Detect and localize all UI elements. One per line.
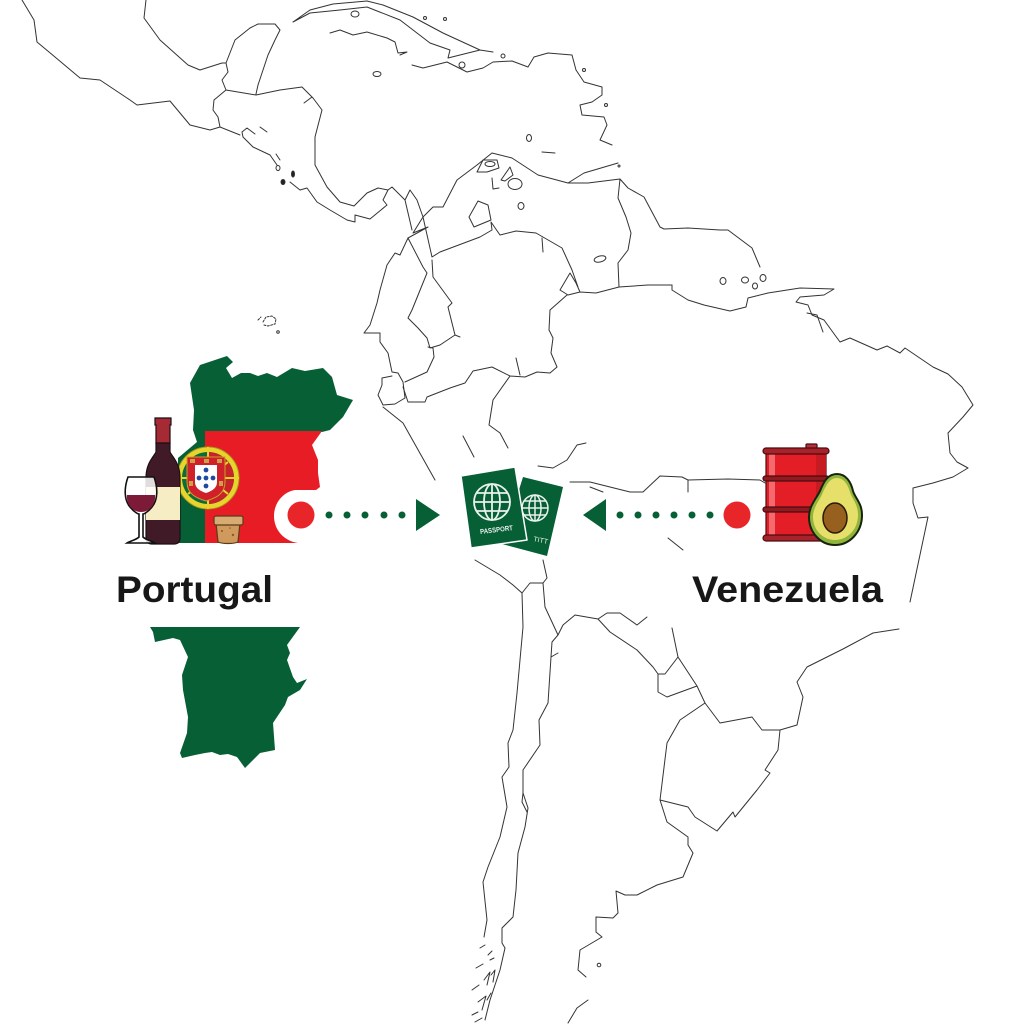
Pacific islands bbox=[258, 316, 276, 326]
Brazil coast bbox=[672, 285, 973, 730]
Portugal upper map shape with flag bbox=[125, 356, 353, 544]
Mexico and Central America coast bbox=[22, 0, 412, 230]
icon: passports bbox=[461, 467, 563, 556]
icon: wine bottle bbox=[146, 418, 180, 544]
Isthmus and Colombia bbox=[364, 190, 460, 480]
icon: oil barrel bbox=[763, 444, 829, 541]
Argentina and neighbours bbox=[558, 613, 780, 1023]
marker: red origin dot bbox=[724, 502, 750, 528]
map: red flag area bbox=[205, 431, 322, 543]
arrow: Venezuela to passports bbox=[583, 499, 750, 531]
icon: wine glass bbox=[125, 477, 157, 543]
map: green north band bbox=[178, 356, 353, 543]
label: Portugal: Portugal bbox=[116, 569, 273, 610]
icon: cork bbox=[214, 516, 243, 544]
icon: avocado bbox=[809, 474, 862, 545]
Northern South America bbox=[403, 153, 760, 468]
Amazon fragments bbox=[570, 476, 765, 550]
passport: back: TITT bbox=[533, 536, 549, 546]
marker: red origin dot bbox=[288, 502, 314, 528]
label: Venezuela: Venezuela bbox=[692, 569, 883, 610]
icon: coat of arms bbox=[177, 447, 239, 509]
map: Portugal lower green shape bbox=[150, 627, 307, 768]
arrow: Portugal to passports bbox=[288, 499, 440, 531]
passport: front: PASSPORT bbox=[480, 525, 514, 536]
Southern islands bbox=[472, 945, 495, 1022]
Caribbean islands bbox=[293, 1, 612, 145]
Chile and Andes bbox=[475, 560, 558, 1020]
